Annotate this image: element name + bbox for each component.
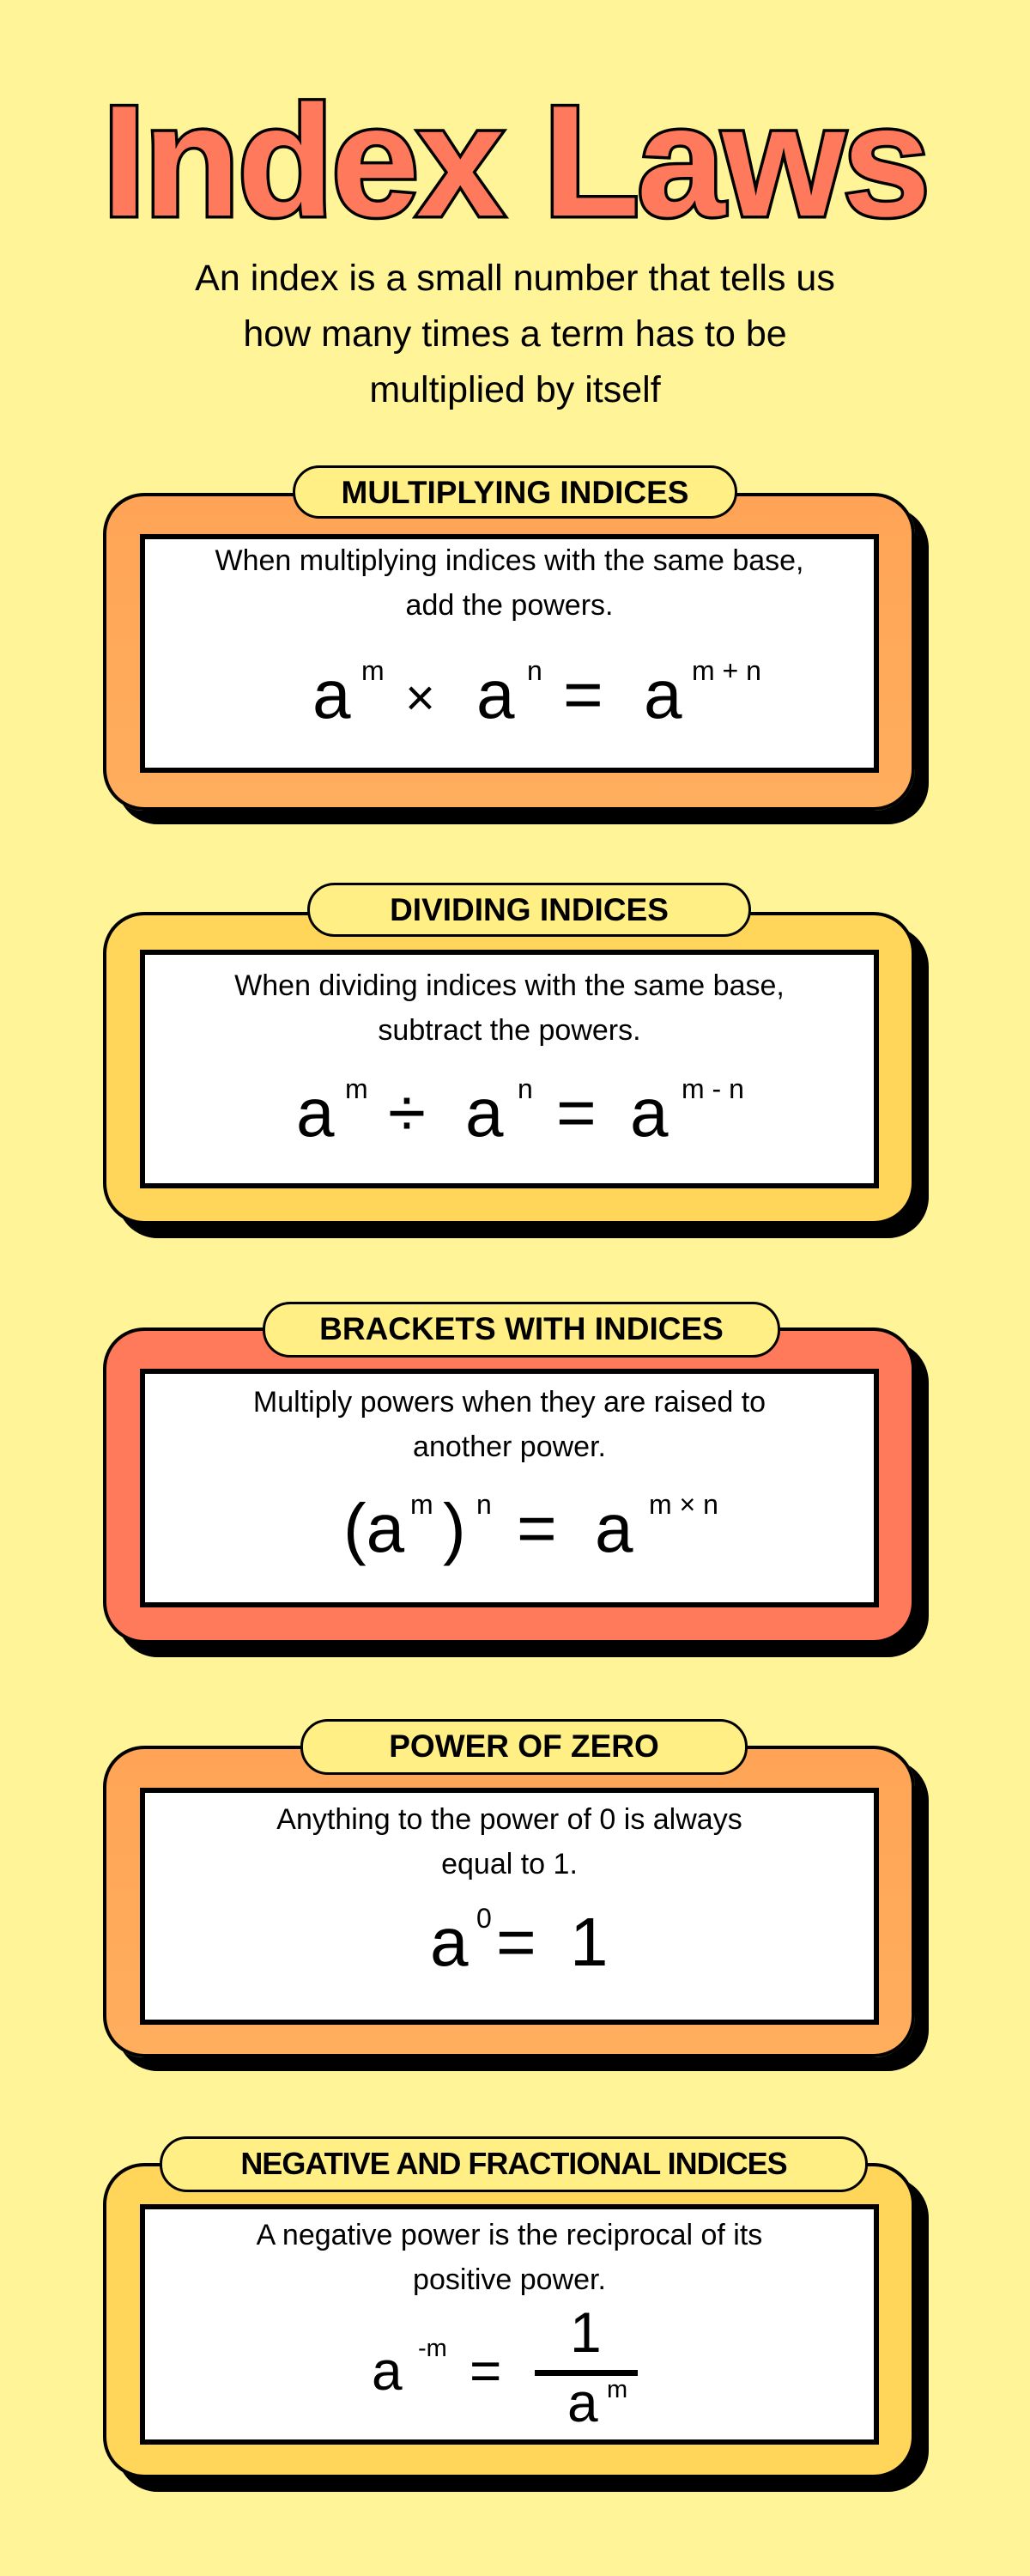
text: m [410,1489,433,1520]
text: multiplying rule [215,544,803,622]
panel: dividing indices [103,912,915,1224]
text: a [465,1074,503,1151]
text: brackets rule [253,1386,766,1463]
white box: multiplying [140,534,879,773]
text: m - n [682,1073,744,1104]
title: Index Laws [102,72,928,249]
text: multiplying rule: When multiplying indices with the same base, [215,544,803,577]
white box: dividing [140,950,879,1188]
text: multiplying rule: add the powers. [406,589,613,622]
text: m [607,2376,627,2403]
text: -m [418,2335,447,2362]
text: m × n [649,1489,718,1520]
pill: multiplying heading: MULTIPLYING INDICES [342,475,688,510]
text: = [470,2340,501,2402]
text: dividing rule: subtract the powers. [378,1014,641,1047]
text: 1 [570,1904,608,1980]
panel: multiplying indices [103,493,915,811]
text: × [405,669,435,726]
pill: brackets heading [263,1302,780,1358]
pill: brackets heading: BRACKETS WITH INDICES [319,1311,724,1346]
formula: negative [372,2300,638,2433]
panel: negative and fractional indices [103,2163,915,2478]
text: n [476,1489,492,1520]
subtitle: An index is a small number that tells us [195,258,835,299]
subtitle: multiplied by itself [369,369,661,410]
formula: dividing [296,1073,744,1151]
pill: negative heading: NEGATIVE AND FRACTIONAL INDICES [240,2146,787,2181]
text: = [496,1904,536,1980]
text: (a [343,1490,404,1566]
pill: dividing heading: DIVIDING INDICES [390,892,669,927]
text: a [567,2372,598,2433]
formula: multiplying [312,655,761,732]
white box: zero [140,1788,879,2025]
text: n [527,655,542,686]
pill: zero heading [300,1719,748,1775]
text: ) [443,1490,466,1566]
text: a [595,1490,633,1566]
pill: multiplying heading [293,465,737,519]
text: 0 [476,1903,492,1934]
text: m + n [692,655,761,686]
text: brackets rule: Multiply powers when they are raised to [253,1386,766,1419]
text: brackets rule: another power. [413,1431,606,1463]
text: negative rule: A negative power is the reciprocal of its [257,2219,762,2251]
pill: dividing heading [307,883,751,937]
text: = [517,1490,557,1566]
subtitle [195,258,835,410]
formula: zero [430,1903,608,1980]
text: a [476,656,515,732]
white box: negative [140,2204,879,2445]
text: ÷ [388,1074,426,1151]
pill: zero heading: POWER OF ZERO [389,1728,659,1764]
text: negative rule [256,2219,762,2296]
text: 1 [570,2300,602,2364]
text: a [372,2340,403,2402]
text: a [296,1074,335,1151]
panel: power of zero [103,1746,915,2057]
text: = [556,1074,597,1151]
text: zero rule: equal to 1. [441,1848,578,1880]
text: dividing rule [234,969,785,1047]
text: m [361,655,385,686]
text: a [644,656,682,732]
text: negative rule: positive power. [413,2263,606,2296]
text: zero rule [276,1803,742,1880]
text: n [518,1073,533,1104]
white box: brackets [140,1369,879,1607]
text: dividing rule: When dividing indices with the same base, [234,969,785,1002]
text: a [430,1904,469,1980]
text: = [563,656,603,732]
subtitle: how many times a term has to be [243,313,787,355]
panel: brackets with indices [103,1327,915,1643]
formula: brackets [343,1489,718,1566]
text: m [345,1073,368,1104]
text: a [312,656,350,732]
text: zero rule: Anything to the power of 0 is always [276,1803,742,1836]
text: a [630,1074,668,1151]
pill: negative heading [160,2136,868,2192]
